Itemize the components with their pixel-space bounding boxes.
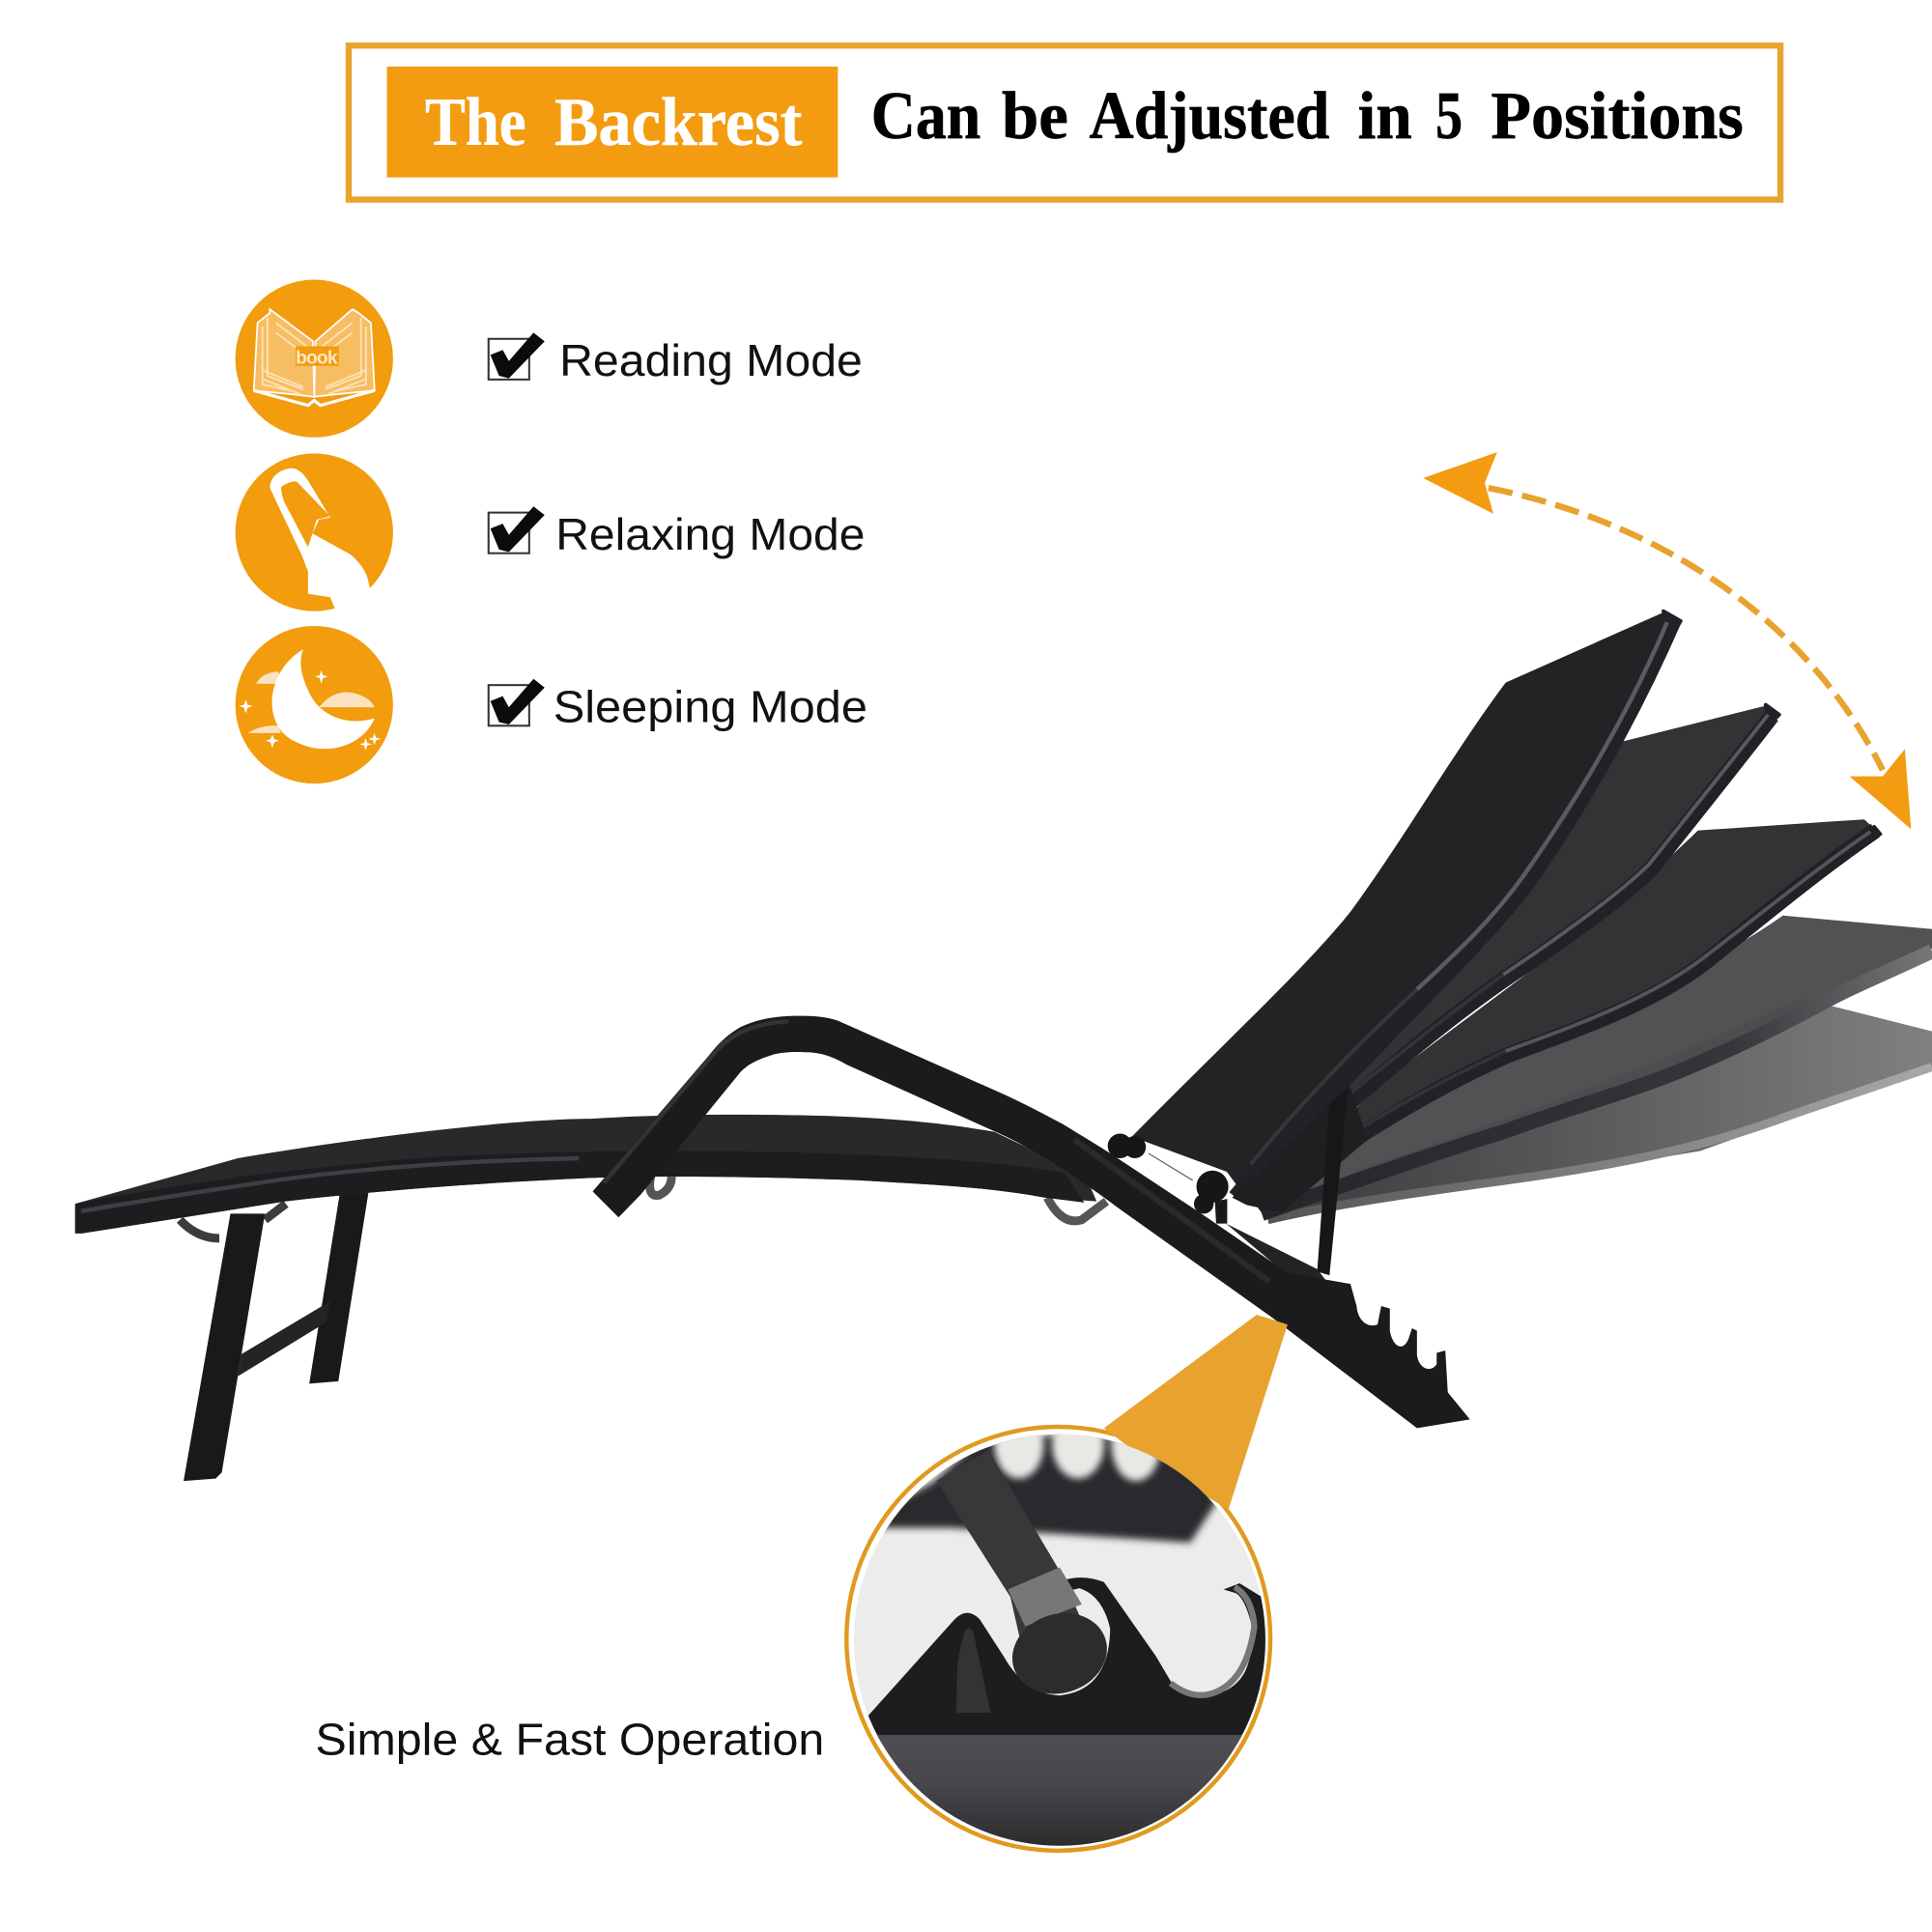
banner text: Can be Adjusted in 5 Positions: Can xyxy=(871,78,980,154)
backrest position 2 xyxy=(1246,705,1779,1200)
banner text: The Backrest: Backrest xyxy=(554,84,803,160)
banner text: The Backrest: The xyxy=(425,84,526,160)
banner text: Can be Adjusted in 5 Positions: be xyxy=(1002,78,1068,154)
icon: book: book xyxy=(296,348,338,368)
banner text: Can be Adjusted in 5 Positions xyxy=(871,78,1744,154)
adjuster tube xyxy=(937,1451,1080,1636)
icon: book xyxy=(236,280,393,438)
checklist: Sleeping Mode: Sleeping Mode xyxy=(554,681,867,731)
icon: moon and clouds xyxy=(236,626,393,783)
lounge chair xyxy=(75,611,1932,1481)
seat xyxy=(75,1115,1096,1234)
foreground rail xyxy=(877,1735,1242,1846)
background rack xyxy=(850,1435,1220,1543)
checklist: Relaxing Mode: Relaxing Mode xyxy=(555,509,865,559)
banner frame xyxy=(349,45,1780,200)
chair legs xyxy=(184,1193,368,1481)
callout wedge xyxy=(1104,1315,1288,1509)
banner text: Can be Adjusted in 5 Positions: 5 xyxy=(1435,78,1463,154)
transparent tube sleeve xyxy=(1008,1567,1082,1627)
background notches xyxy=(989,1434,1215,1505)
lens ring xyxy=(846,1427,1270,1851)
tube end cap xyxy=(1012,1613,1107,1694)
armrest and side rail with notches xyxy=(593,1016,1470,1428)
backrest position 3 xyxy=(1257,819,1880,1207)
rack foreground xyxy=(850,1577,1282,1744)
arrow: backrest adjustment arc xyxy=(1423,452,1911,829)
under-seat brackets xyxy=(180,1177,1106,1238)
callout: zoom detail lens xyxy=(846,1315,1288,1851)
hook highlight xyxy=(1171,1587,1254,1695)
convergence of backrest tubes at hinge xyxy=(1233,1084,1368,1212)
banner orange label xyxy=(387,67,838,178)
backrest pivots and struts xyxy=(1108,1088,1355,1319)
banner text: Can be Adjusted in 5 Positions: in xyxy=(1358,78,1412,154)
banner text: Can be Adjusted in 5 Positions: Positions xyxy=(1491,78,1744,154)
banner text: The Backrest xyxy=(425,84,803,160)
backrest position 5 xyxy=(1267,998,1932,1222)
banner text: Can be Adjusted in 5 Positions: Adjusted xyxy=(1090,78,1329,154)
backrest position 1 (upright) xyxy=(1132,611,1681,1198)
caption: Simple & Fast Operation xyxy=(316,1714,824,1764)
icon: relaxing person xyxy=(236,453,393,612)
title banner xyxy=(349,45,1780,200)
backrest position 4 xyxy=(1262,916,1932,1213)
rack inner rib xyxy=(956,1628,991,1713)
lens photo: notch detail xyxy=(854,1434,1265,1846)
checklist: Reading Mode: Reading Mode xyxy=(559,335,863,385)
